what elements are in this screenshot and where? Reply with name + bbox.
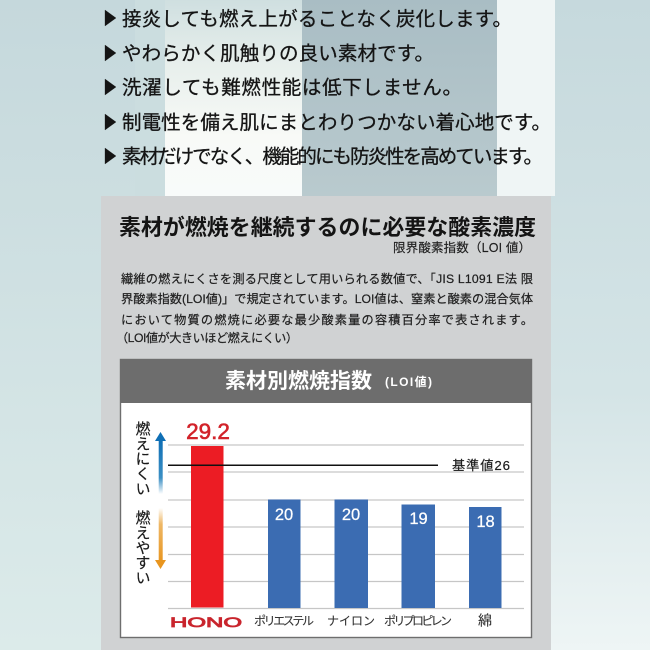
category labels bbox=[170, 612, 492, 630]
bar: nylon 20: 20 bbox=[342, 506, 360, 524]
bar: polypropylene 19 bbox=[402, 504, 435, 608]
bullet 1: 接炎しても燃え上がることなく炭化します。 bbox=[122, 8, 512, 30]
description text bbox=[116, 271, 533, 345]
arrow: down orange bbox=[155, 508, 166, 569]
chart panel bbox=[120, 359, 532, 638]
bar: polyester 20: 20 bbox=[275, 506, 293, 524]
bar: HONO 29.2 bbox=[186, 419, 230, 608]
category labels: ポリエステル bbox=[254, 614, 314, 628]
chart header bar: (LOI値) bbox=[385, 374, 432, 389]
reference line at 26: 基準値26 bbox=[452, 458, 510, 473]
bullet 4: 制電性を備え肌にまとわりつかない着心地です。 bbox=[122, 112, 551, 134]
description text: 界酸素指数(LOI値)」で規定されています。LOI値は、窒素と酸素の混合気体 bbox=[121, 291, 533, 306]
bar: nylon 20 bbox=[334, 500, 368, 608]
chart header bar: 素材別燃焼指数 bbox=[225, 370, 372, 393]
category labels: 綿 bbox=[478, 612, 492, 628]
bar: cotton 18 bbox=[469, 507, 502, 608]
description text: 繊維の燃えにくさを測る尺度として用いられる数値で、「JIS L1091 E法 限 bbox=[121, 271, 533, 286]
logo: HONO: HONO bbox=[170, 614, 242, 630]
panel subheading: 限界酸素指数（LOI 値） bbox=[393, 240, 531, 255]
category labels: ナイロン bbox=[327, 614, 375, 628]
category labels: ポリプロピレン bbox=[384, 614, 452, 628]
bullet 2: やわらかく肌触りの良い素材です。 bbox=[122, 43, 434, 65]
grid lines bbox=[168, 445, 524, 608]
bullet list of features bbox=[105, 8, 551, 168]
bar: polyester 20 bbox=[268, 500, 300, 608]
description text: （LOI値が大きいほど燃えにくい） bbox=[116, 330, 298, 345]
panel heading: 素材が燃焼を継続するのに必要な酸素濃度 bbox=[119, 215, 536, 240]
chart header bar bbox=[120, 359, 532, 403]
arrow: up blue bbox=[155, 432, 166, 494]
bullet 3: 洗濯しても難燃性能は低下しません。 bbox=[122, 77, 462, 99]
bullet 5: 素材だけでなく、機能的にも防炎性を高めています。 bbox=[122, 146, 543, 168]
axis label: hard to burn: 燃えにくい bbox=[134, 420, 150, 496]
axis label: easy to burn: 燃えやすい bbox=[134, 509, 150, 585]
panel: LOI explanation bbox=[101, 196, 551, 650]
bar: cotton 18: 18 bbox=[476, 513, 495, 531]
bar: polypropylene 19: 19 bbox=[409, 510, 428, 528]
description text: において物質の燃焼に必要な最少酸素量の容積百分率で表されます。 bbox=[121, 312, 533, 327]
bar: HONO 29.2: 29.2 bbox=[186, 419, 230, 444]
